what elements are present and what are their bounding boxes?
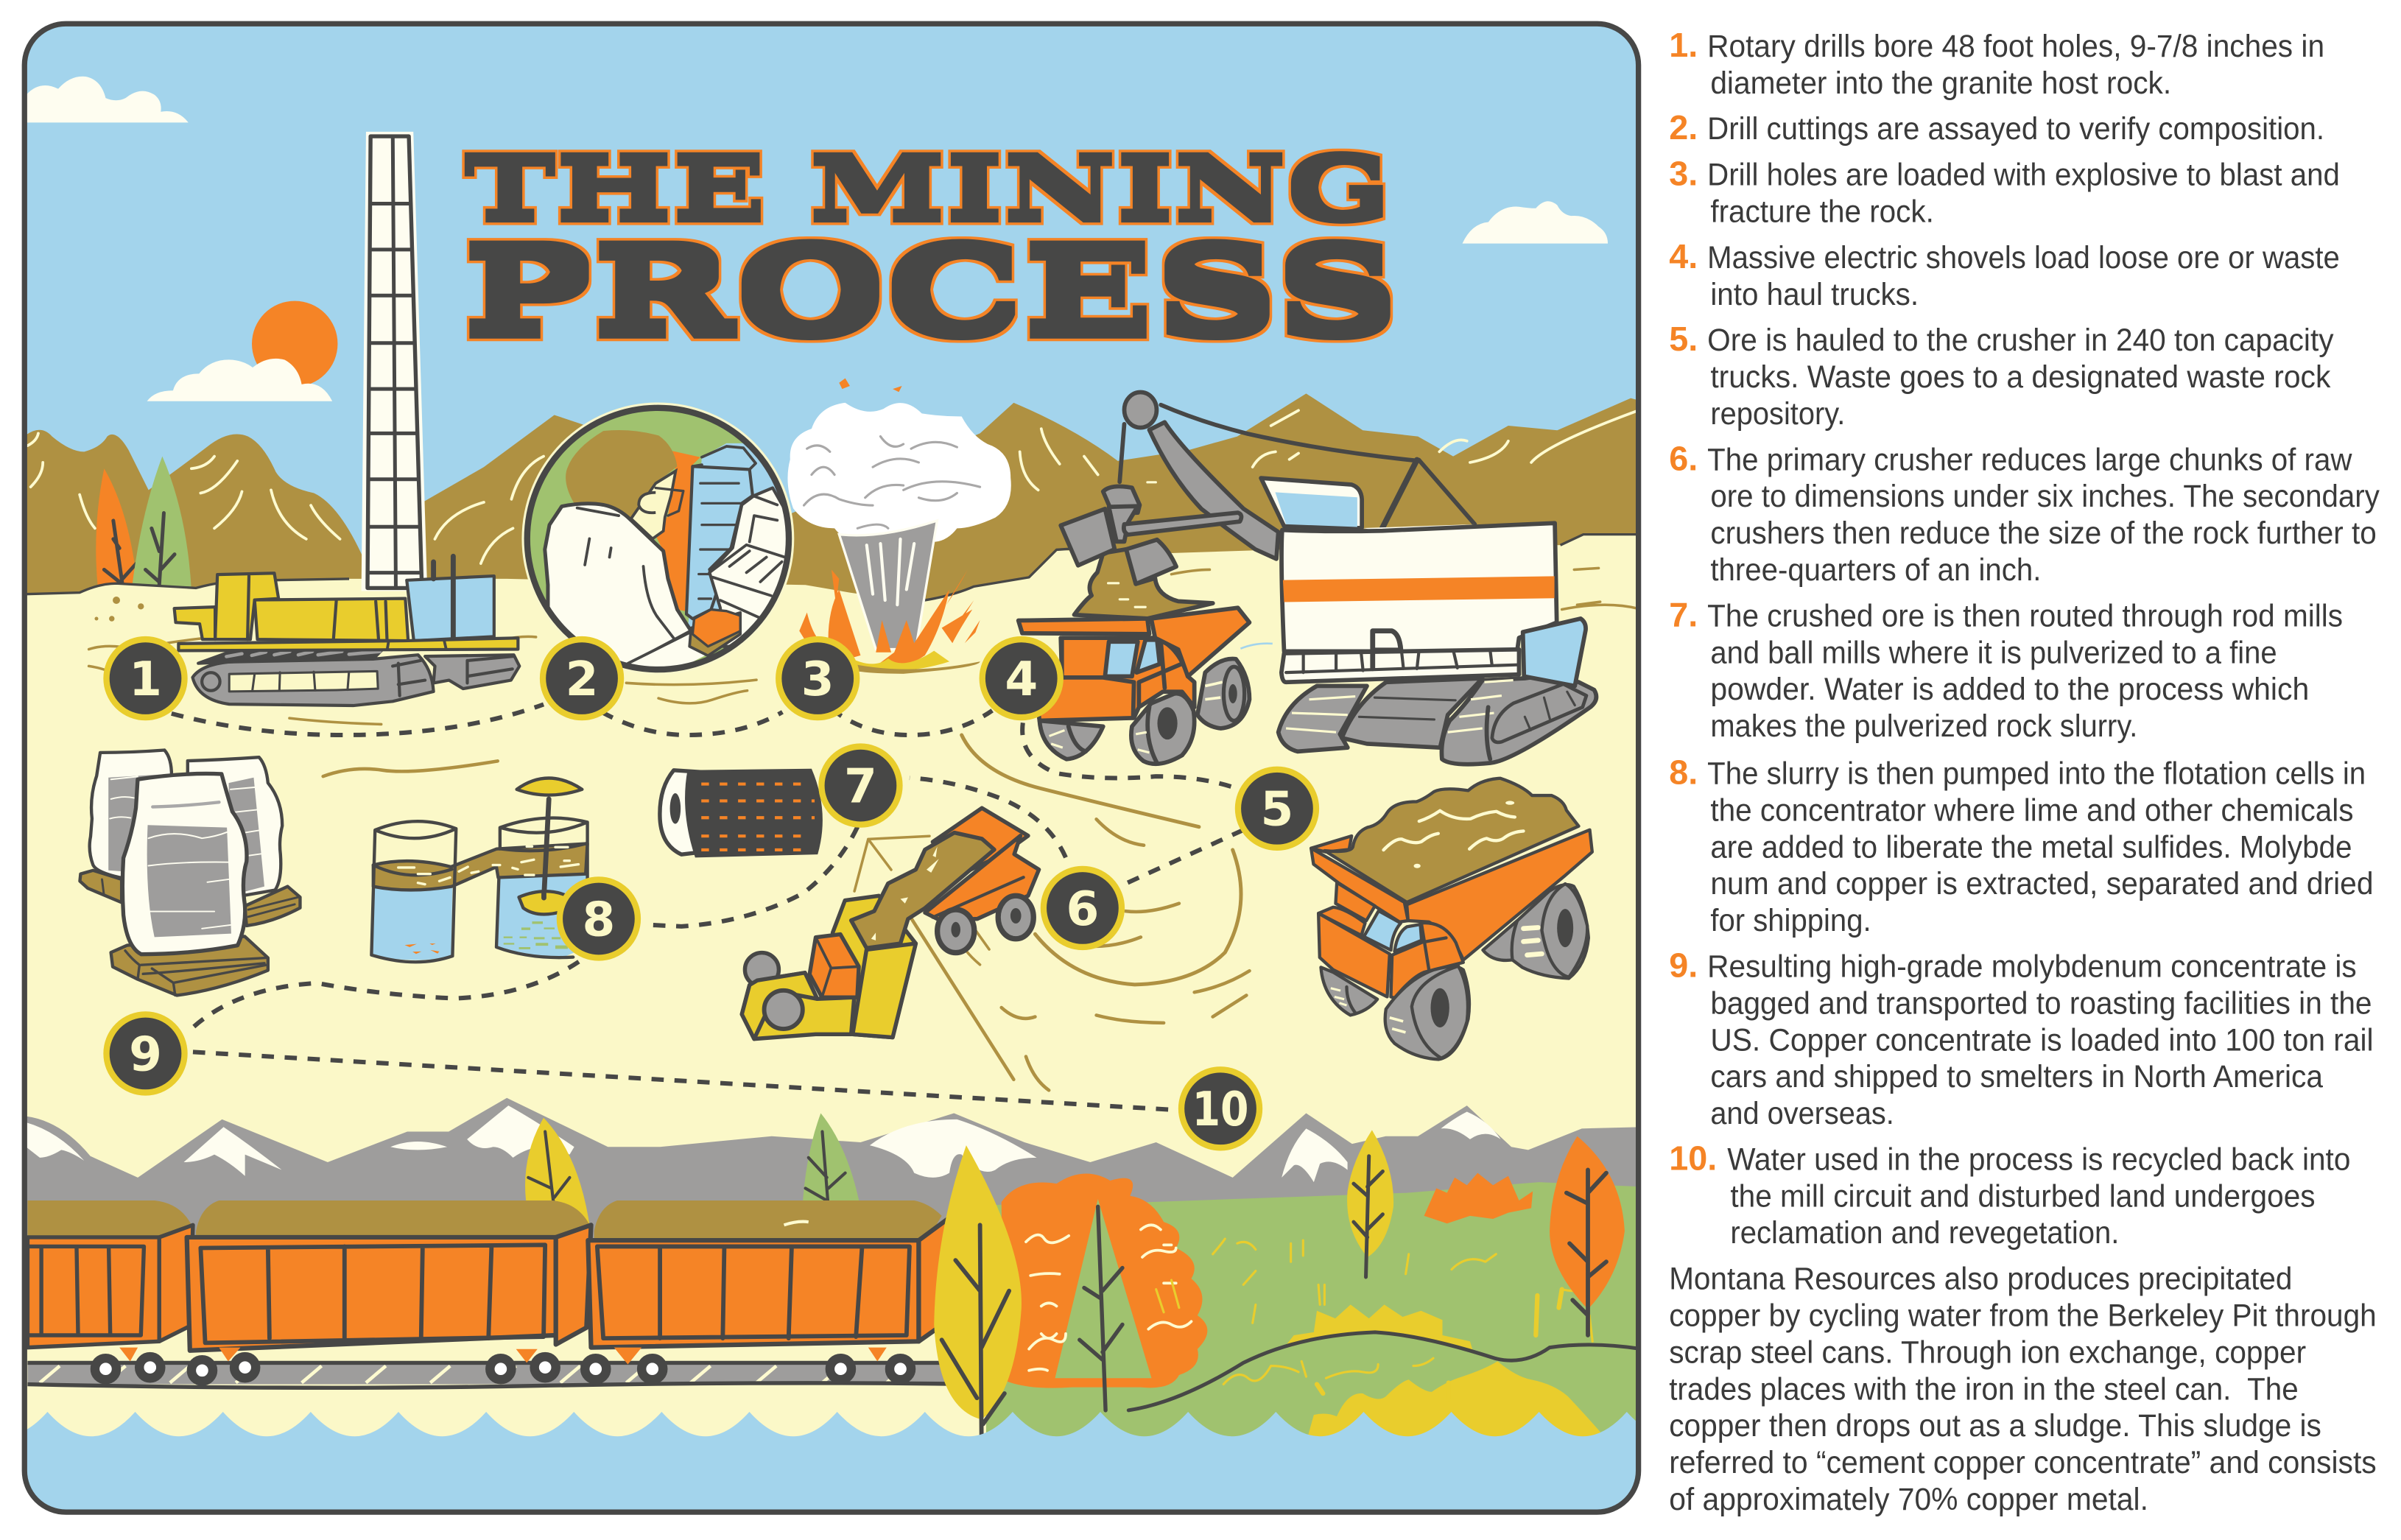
step 9 text: bagged and transported to roasting facilities in the [1710, 985, 2372, 1020]
tree: yellow behind train [525, 1118, 589, 1225]
step 9 text [1669, 946, 2374, 1131]
step 7 rod mill [660, 769, 823, 857]
step 10 text [1669, 1139, 2350, 1250]
step 9 bagged concentrate on pallets [80, 750, 300, 995]
step 8 text: The slurry is then pumped into the flotation cells in [1707, 756, 2366, 791]
process path dashes [172, 704, 1243, 1110]
ore haul road curves [854, 735, 1250, 1090]
icon: sun [252, 301, 337, 387]
step 9 text: US. Copper concentrate is loaded into 100 ton rail [1710, 1022, 2374, 1057]
rail track [27, 1363, 982, 1388]
step badge 9 [106, 1014, 185, 1092]
step 2 text: Drill cuttings are assayed to verify composition. [1707, 111, 2324, 146]
step 8 text: are added to liberate the metal sulfides. Molybde [1710, 829, 2352, 864]
step badge 8: 8 [582, 892, 615, 947]
closing paragraph: copper then drops out as a sludge. This sludge is [1669, 1408, 2321, 1443]
step 3 text [1669, 155, 2340, 229]
step 9 text: Resulting high-grade molybdenum concentrate is [1707, 949, 2357, 983]
step badge 1 [106, 639, 185, 717]
gray snow mountains [27, 1097, 1636, 1238]
closing paragraph: scrap steel cans. Through ion exchange, copper [1669, 1335, 2306, 1369]
step 4 text [1669, 237, 2340, 312]
panel: illustrated mining scene [0, 24, 1715, 1531]
step 4 electric shovel [1061, 392, 1596, 764]
step badge 7: 7 [844, 759, 877, 814]
green meadow [986, 1182, 1642, 1484]
step 8 flotation cells [371, 778, 588, 962]
step 10 text: the mill circuit and disturbed land undergoes [1730, 1178, 2316, 1213]
tree: orange on left hills [96, 468, 138, 589]
closing paragraph: Montana Resources also produces precipitated [1669, 1262, 2292, 1296]
step 7 text: powder. Water is added to the process which [1710, 672, 2309, 706]
step badge 10: 10 [1192, 1082, 1248, 1137]
title: PROCESS [463, 224, 1399, 360]
step 8 text: num and copper is extracted, separated and dried [1710, 866, 2374, 901]
step 8 text: for shipping. [1710, 903, 1871, 938]
step badge 4 [982, 639, 1061, 717]
step 6 text: ore to dimensions under six inches. The secondary [1710, 479, 2380, 513]
step 7 text: makes the pulverized rock slurry. [1710, 709, 2137, 743]
step 7 text: and ball mills where it is pulverized to a fine [1710, 635, 2277, 669]
step badge 2 [543, 639, 621, 717]
panel frame [24, 24, 1639, 1512]
icon: cloud by sun [147, 359, 332, 401]
step badge 5: 5 [1261, 782, 1293, 837]
step 5 text: Ore is hauled to the crusher in 240 ton capacity [1707, 323, 2334, 357]
step 2 lab lens [521, 400, 801, 678]
step 5 text [1669, 320, 2334, 431]
train car left [27, 1200, 193, 1361]
tree: green on left hills [132, 457, 191, 589]
step 2 text: 2. [1669, 108, 1698, 147]
step 8 text: 8. [1669, 753, 1698, 792]
tree: orange right [1550, 1136, 1625, 1335]
step 1 text: Rotary drills bore 48 foot holes, 9-7/8 inches in [1707, 29, 2324, 63]
closing paragraph [1669, 1262, 2377, 1516]
step badge 5 [1238, 770, 1316, 848]
step 7 text [1669, 595, 2343, 743]
step badge 4: 4 [1005, 652, 1038, 707]
tree: big yellow foreground [934, 1145, 1022, 1439]
step 3 text: Drill holes are loaded with explosive to blast and [1707, 158, 2340, 192]
hill line and yellow field [1128, 1239, 1642, 1443]
step badge 3 [778, 639, 857, 717]
step 3 text: 3. [1669, 155, 1698, 193]
step badge 8 [560, 879, 638, 957]
step 7 text: 7. [1669, 595, 1698, 633]
step 10 text: 10. [1669, 1139, 1717, 1177]
step 9 text: 9. [1669, 946, 1698, 984]
step badge 1: 1 [129, 652, 162, 707]
closing paragraph: trades places with the iron in the steel can. The [1669, 1371, 2299, 1406]
step 6 text: The primary crusher reduces large chunks of raw [1707, 442, 2352, 477]
step badge 3: 3 [801, 652, 834, 707]
step 4 haul truck [1019, 608, 1249, 764]
step 4 text: 4. [1669, 237, 1698, 275]
step 6 text: 6. [1669, 439, 1698, 477]
step 7 text: The crushed ore is then routed through rod mills [1707, 598, 2343, 633]
step 5 text: repository. [1710, 396, 1845, 431]
step 6 primary crusher [742, 808, 1039, 1039]
step 8 text: the concentrator where lime and other chemicals [1710, 792, 2354, 827]
panel: process steps text [1669, 26, 2380, 1516]
step 4 text: Massive electric shovels load loose ore or waste [1707, 240, 2340, 275]
train car right [588, 1200, 948, 1364]
brown mountains [27, 393, 1636, 600]
orange tree bush [1002, 1174, 1207, 1410]
step 10 text: Water used in the process is recycled back into [1727, 1142, 2350, 1176]
step 6 text: crushers then reduce the size of the rock further to [1710, 516, 2377, 550]
step 6 text: three-quarters of an inch. [1710, 552, 2041, 587]
step 1 text: diameter into the granite host rock. [1710, 66, 2171, 100]
step 5 loaded haul truck [1311, 778, 1592, 1059]
step 1 text [1669, 26, 2324, 100]
step badge 10 [1181, 1069, 1259, 1147]
step 10 text: reclamation and revegetation. [1730, 1215, 2119, 1250]
step 3 text: fracture the rock. [1710, 194, 1934, 229]
step 1 text: 1. [1669, 26, 1698, 64]
small orange bush [1424, 1173, 1533, 1223]
title: THE MINING [464, 139, 1392, 238]
title [463, 139, 1399, 360]
drill rig machine [175, 556, 519, 706]
step 9 text: and overseas. [1710, 1096, 1894, 1131]
closing paragraph: of approximately 70% copper metal. [1669, 1482, 2148, 1516]
closing paragraph: referred to “cement copper concentrate” and consists [1669, 1445, 2377, 1480]
step 3 blast [787, 379, 1011, 674]
ground [26, 535, 1642, 1477]
water scallops [0, 1412, 1715, 1531]
step 9 text: cars and shipped to smelters in North America [1710, 1059, 2323, 1094]
step 5 text: trucks. Waste goes to a designated waste rock [1710, 359, 2331, 394]
chimney stack [365, 135, 424, 588]
icon: cloud top left [26, 77, 189, 122]
ground dirt marks [89, 568, 1642, 776]
closing paragraph: copper by cycling water from the Berkeley Pit through [1669, 1298, 2377, 1333]
step 8 text [1669, 753, 2374, 938]
tree: green behind train [803, 1114, 859, 1200]
step badge 6 [1044, 869, 1122, 947]
train car middle [187, 1200, 591, 1363]
icon: cloud top right [1463, 201, 1608, 244]
train wheels [95, 1357, 911, 1381]
step badge 7 [821, 747, 899, 825]
step badge 9: 9 [129, 1027, 162, 1082]
step 4 text: into haul trucks. [1710, 277, 1919, 312]
step badge 2: 2 [566, 652, 598, 707]
step 5 text: 5. [1669, 320, 1698, 358]
step badge 6: 6 [1066, 882, 1099, 937]
step 6 text [1669, 439, 2380, 587]
tree: yellow meadow tree [1347, 1130, 1393, 1277]
ore train [27, 1200, 982, 1388]
